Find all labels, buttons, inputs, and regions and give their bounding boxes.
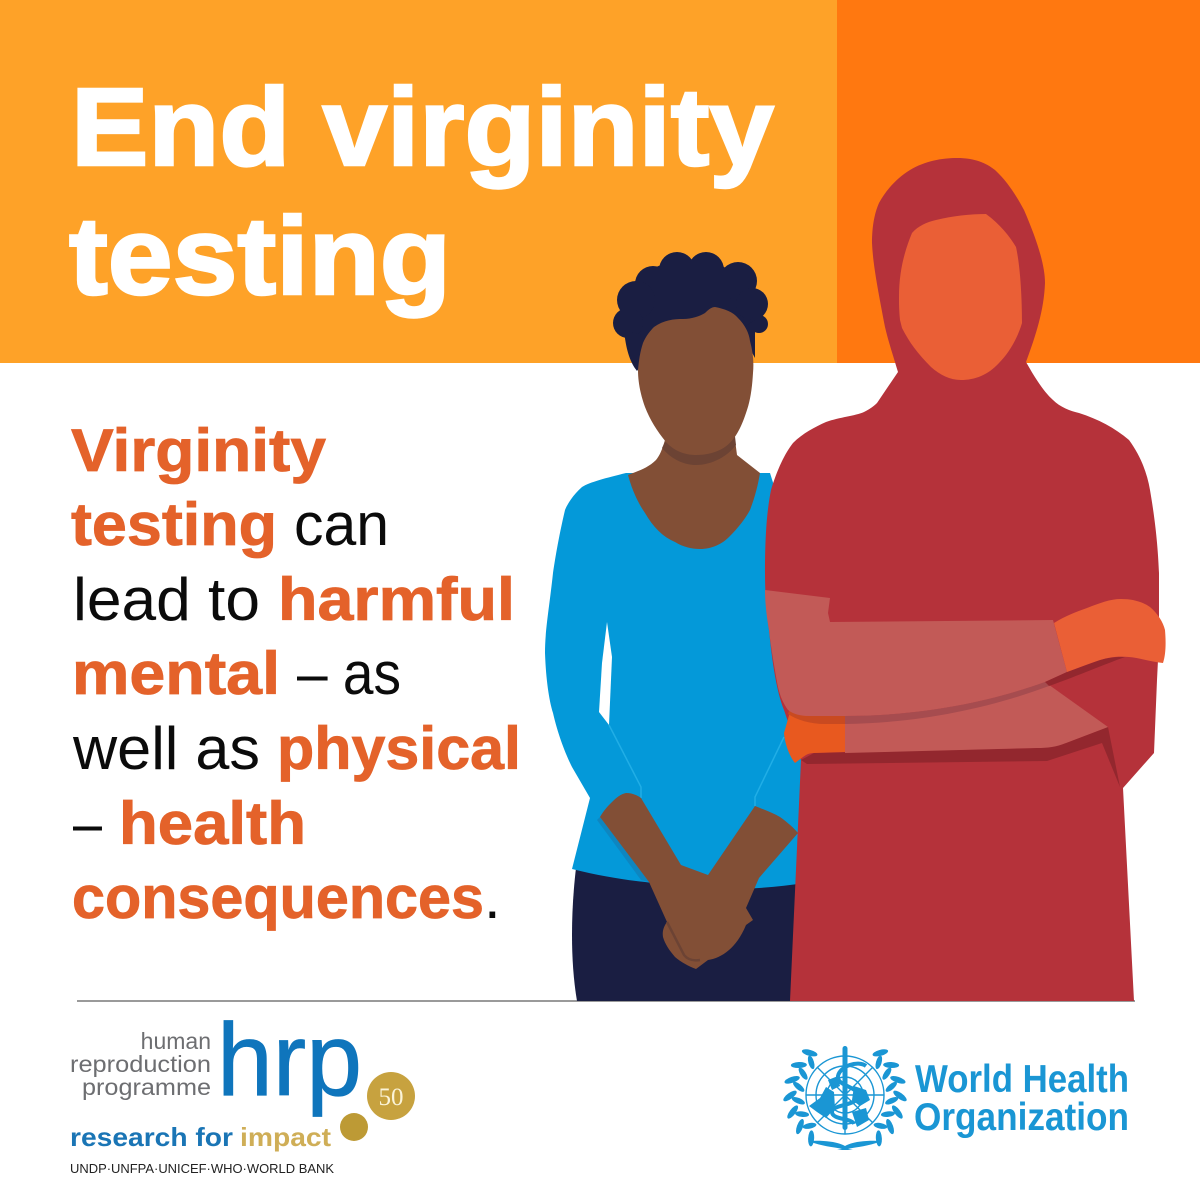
upper arm sleeve bbox=[765, 590, 1067, 716]
body text: consequences bbox=[72, 864, 484, 931]
wreath bbox=[782, 1048, 908, 1150]
sleeve shadow bbox=[845, 682, 1049, 724]
WHO wordmark: World Health bbox=[915, 1058, 1129, 1101]
face bbox=[899, 214, 1022, 380]
left hand bbox=[784, 712, 845, 763]
gold dot bbox=[340, 1113, 368, 1141]
body text: testing bbox=[71, 491, 277, 558]
body text bbox=[71, 417, 521, 931]
body text: . bbox=[484, 864, 501, 931]
gold badge 50 bbox=[367, 1072, 415, 1120]
logo: hrp bbox=[70, 1002, 415, 1176]
face bbox=[638, 307, 753, 455]
serpent bbox=[832, 1064, 866, 1124]
body text: – as bbox=[297, 640, 401, 707]
title: testing bbox=[69, 195, 451, 318]
shadow below right hand bbox=[1045, 657, 1125, 686]
left hand shadow bbox=[788, 708, 845, 724]
sleeve seams bbox=[609, 725, 784, 806]
body text: lead to bbox=[73, 566, 260, 633]
divider line bbox=[77, 1000, 1135, 1002]
continents bbox=[809, 1087, 835, 1118]
strapline: research for bbox=[70, 1122, 233, 1152]
programme name: reproduction bbox=[70, 1051, 211, 1077]
WHO wordmark bbox=[914, 1058, 1129, 1139]
blue top bbox=[545, 473, 810, 889]
robe and hood bbox=[765, 158, 1159, 1001]
figure: woman in blue bbox=[545, 252, 810, 1001]
trousers bbox=[572, 868, 805, 1001]
gap between arm and torso bbox=[599, 622, 612, 725]
body text: mental bbox=[72, 640, 280, 707]
emblem bbox=[782, 1046, 908, 1150]
body text: harmful bbox=[278, 566, 515, 633]
body text: Virginity bbox=[71, 417, 327, 484]
body text: health bbox=[119, 790, 306, 857]
lower arm sleeve bbox=[845, 682, 1108, 753]
gold badge 50: 50 bbox=[378, 1084, 404, 1111]
programme name bbox=[70, 1028, 211, 1100]
header panel: light orange bbox=[0, 0, 837, 363]
staff bbox=[842, 1046, 848, 1130]
hair bbox=[613, 252, 768, 371]
logo: hrp: impact bbox=[240, 1122, 331, 1152]
finger line bbox=[667, 922, 700, 960]
figure: woman in red hijab bbox=[765, 158, 1166, 1001]
dark fold under arm bbox=[801, 727, 1120, 787]
shirt shadow by arm bbox=[597, 817, 649, 882]
header panel: dark orange bbox=[837, 0, 1200, 363]
logo: World Health Organization bbox=[782, 1046, 1129, 1150]
sponsors: UNDP·UNFPA·UNICEF·WHO·WORLD BANK bbox=[70, 1162, 335, 1176]
globe bbox=[806, 1056, 884, 1134]
clasped arms bbox=[600, 793, 798, 969]
neck and chest bbox=[628, 432, 760, 549]
right hand bbox=[1054, 599, 1166, 672]
title: End virginity bbox=[71, 66, 774, 189]
body text: can bbox=[294, 491, 389, 558]
WHO wordmark: Organization bbox=[914, 1096, 1129, 1139]
body text: – bbox=[73, 790, 103, 857]
body text: well as bbox=[72, 715, 260, 782]
body text: physical bbox=[277, 715, 521, 782]
hrp wordmark: hrp bbox=[217, 1002, 362, 1117]
title bbox=[69, 66, 774, 318]
neck shadow bbox=[662, 428, 736, 465]
programme name: programme bbox=[82, 1074, 211, 1100]
programme name: human bbox=[141, 1028, 211, 1054]
